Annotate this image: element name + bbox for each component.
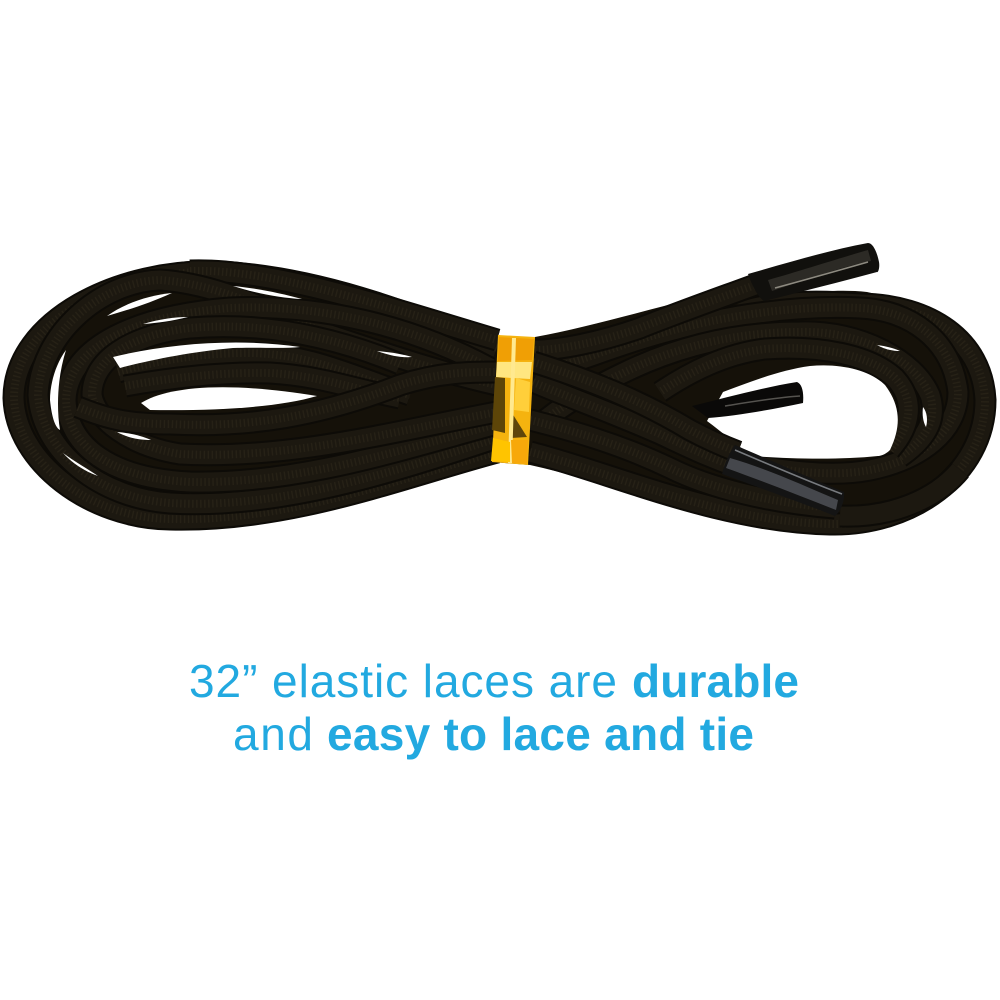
lace tip: top [748, 243, 879, 301]
left loop of lace strands [14, 271, 497, 519]
lace bundle silhouette [3, 260, 996, 534]
caption: 32” elastic laces are [189, 655, 617, 707]
right loop of lace strands [530, 284, 985, 524]
lace tip: bottom [722, 445, 844, 516]
lace tip: middle [692, 382, 803, 418]
lower right strands [530, 362, 835, 508]
caption: durable [632, 655, 799, 707]
right loop gaps [707, 345, 927, 459]
gold band [491, 335, 535, 465]
caption: easy to lace and tie [327, 708, 754, 760]
left loop gaps [50, 286, 412, 476]
caption: and [233, 708, 313, 760]
